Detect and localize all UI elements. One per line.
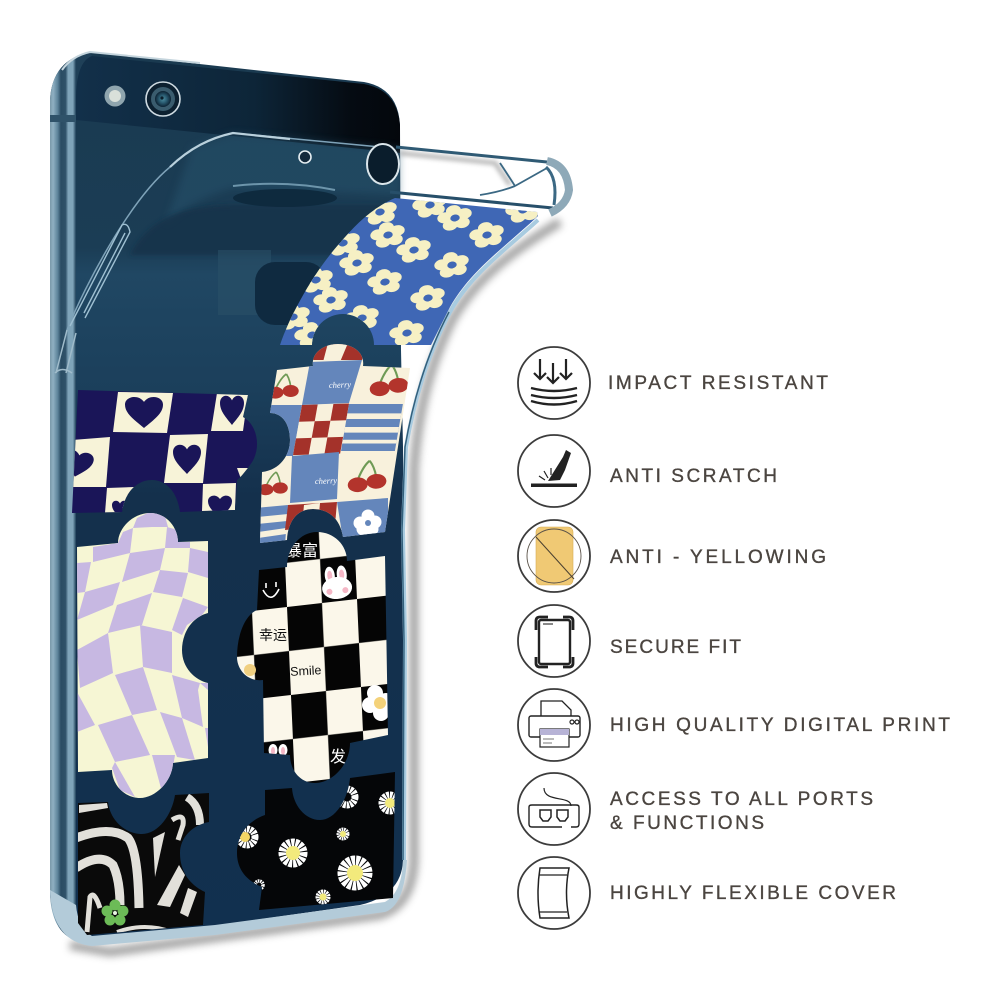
chinese label bottom: 发 [330, 748, 346, 766]
smile label: Smile [290, 663, 322, 679]
case flash hole [299, 151, 311, 163]
smiley [263, 582, 279, 597]
metal frame left side [50, 52, 92, 942]
puzzle piece: cherries: cherry [315, 475, 337, 486]
bunny ears bottom [268, 744, 288, 756]
dark region below slot [130, 205, 400, 255]
puzzle piece: black daisies [237, 772, 395, 910]
icon: printer [518, 689, 590, 761]
egg flower right [362, 685, 388, 721]
label: impact resistant: IMPACT RESISTANT [608, 373, 828, 394]
rim seam [480, 163, 547, 195]
label: access to all ports and functions: & FUNCTIONS [610, 813, 764, 834]
label: high quality digital print: HIGH QUALITY DIGITAL PRINT [610, 715, 950, 736]
puzzle piece: blue flowers [280, 198, 538, 345]
label: anti scratch: ANTI SCRATCH [610, 466, 777, 487]
case camera ring [367, 144, 399, 184]
bottom case rim [50, 860, 407, 946]
puzzle piece: navy hearts [72, 390, 257, 513]
rim end cap [546, 161, 569, 213]
icon: flexible cover [518, 857, 590, 929]
top highlight edge [62, 52, 200, 70]
icon: secure fit [518, 605, 590, 677]
icon: ports [518, 773, 590, 845]
icon: anti scratch [518, 435, 590, 507]
label: access to all ports and functions: ACCESS TO ALL PORTS [610, 789, 873, 810]
green clover [102, 900, 128, 926]
case left edge [67, 133, 380, 330]
puzzle piece: lilac wavy checker [77, 513, 208, 798]
bunny sticker [322, 566, 352, 599]
icon: impact resistant [518, 347, 590, 419]
case lighter top band [165, 133, 400, 225]
flash [104, 86, 126, 106]
top glass band [76, 56, 400, 153]
frame seam [50, 115, 76, 122]
chinese label top: 暴富 [286, 542, 318, 560]
case bright corner highlight [170, 133, 290, 167]
phone back body [50, 52, 404, 942]
phone with transparent case [50, 52, 569, 952]
camera lens [146, 82, 180, 116]
label: secure fit: SECURE FIT [610, 637, 741, 658]
puzzle piece: cherries [255, 340, 415, 545]
shadow below top rim [400, 153, 510, 185]
label: access to all ports and functions [610, 789, 873, 834]
case drop shadow [70, 222, 560, 952]
fingerprint module [218, 250, 326, 325]
egg flower left [244, 664, 256, 676]
puzzle piece: zebra waves [78, 793, 209, 935]
label: highly flexible cover: HIGHLY FLEXIBLE COVER [610, 883, 896, 904]
case side button [70, 224, 130, 326]
case lower left joint [55, 330, 76, 373]
puzzle piece: cherries: cherry [329, 379, 351, 390]
puzzle piece: black and white checker [237, 532, 388, 783]
icon: anti yellowing [518, 520, 590, 592]
lower rim [390, 192, 553, 208]
top rim [396, 147, 547, 162]
label: anti yellowing: ANTI - YELLOWING [610, 547, 826, 568]
case camera bump slot [233, 184, 337, 207]
right curved rim [402, 220, 538, 860]
chinese label left: 幸运 [259, 627, 287, 643]
